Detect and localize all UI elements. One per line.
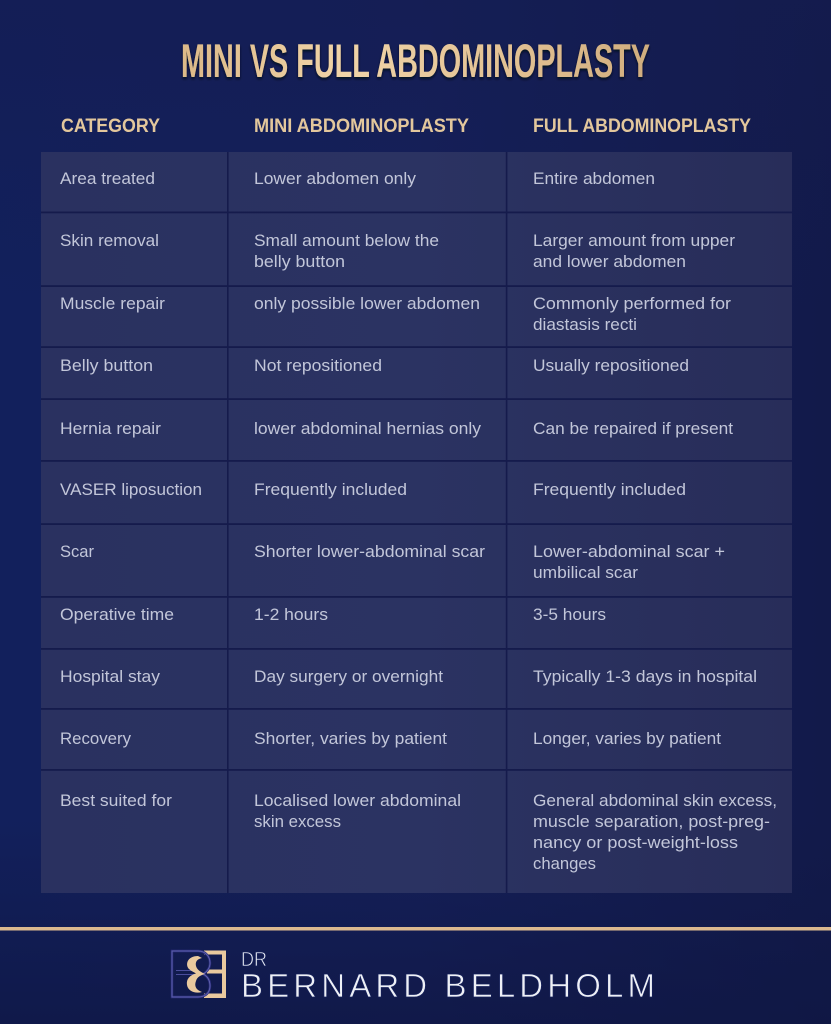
row: hernia repair: Can be repaired if present (533, 420, 733, 438)
table panel background (41, 152, 792, 893)
row: skin removal: belly button (254, 253, 345, 271)
row: vaser liposuction (60, 481, 686, 499)
row: hernia repair: lower abdominal hernias only (254, 420, 482, 438)
row: recovery: Shorter, varies by patient (254, 730, 447, 748)
row: best suited for: skin excess (254, 813, 341, 831)
row: hernia repair: Hernia repair (60, 420, 162, 438)
row: skin removal (60, 232, 736, 271)
row: area treated: Area treated (60, 170, 155, 188)
row: vaser liposuction: VASER liposuction (60, 481, 202, 499)
row: hernia repair (60, 420, 733, 438)
footer gold divider (0, 927, 831, 930)
table header row (61, 116, 751, 137)
row: operative time: 3-5 hours (533, 606, 606, 624)
comparison table (41, 152, 792, 893)
row: muscle repair: Commonly performed for (533, 295, 732, 313)
row: operative time: Operative time (60, 606, 174, 624)
row: best suited for: Best suited for (60, 792, 173, 810)
row: recovery: Longer, varies by patient (533, 730, 721, 748)
row: operative time: 1-2 hours (254, 606, 328, 624)
row: scar: umbilical scar (533, 564, 639, 582)
row: recovery: Recovery (60, 730, 132, 748)
row: muscle repair: diastasis recti (533, 316, 637, 334)
row: hospital stay: Typically 1-3 days in hospital (533, 668, 757, 686)
header: full abdominoplasty: FULL ABDOMINOPLASTY (533, 116, 751, 137)
row: scar: Scar (60, 543, 94, 561)
row: area treated (60, 170, 655, 188)
row: skin removal: Small amount below the (254, 232, 439, 250)
row: skin removal: Skin removal (60, 232, 159, 250)
row: belly button: Belly button (60, 357, 153, 375)
wordmark: DR: DR (241, 949, 267, 971)
row: skin removal: and lower abdomen (533, 253, 686, 271)
header: category: CATEGORY (61, 116, 160, 137)
row: area treated: Lower abdomen only (254, 170, 417, 188)
row: hospital stay: Day surgery or overnight (254, 668, 443, 686)
wordmark: Bernard Beldholm: BERNARD BELDHOLM (241, 967, 655, 1004)
row: best suited for: General abdominal skin excess, (533, 792, 777, 810)
row: muscle repair (60, 295, 732, 334)
logo wordmark (241, 949, 655, 1004)
row: hospital stay: Hospital stay (60, 668, 161, 686)
row: belly button: Not repositioned (254, 357, 382, 375)
row: operative time (60, 606, 606, 624)
row: scar: Lower-abdominal scar + (533, 543, 725, 561)
logo: BB monogram (172, 950, 226, 998)
row: best suited for (60, 792, 777, 873)
row: scar: Shorter lower-abdominal scar (254, 543, 486, 561)
row: scar (60, 543, 725, 582)
row: best suited for: muscle separation, post-preg- (533, 813, 770, 831)
row: vaser liposuction: Frequently included (254, 481, 407, 499)
row: best suited for: nancy or post-weight-loss (533, 834, 738, 852)
row: belly button: Usually repositioned (533, 357, 689, 375)
row: best suited for: changes (533, 855, 596, 873)
row: recovery (60, 730, 721, 748)
header: mini abdominoplasty: MINI ABDOMINOPLASTY (254, 116, 469, 137)
row: vaser liposuction: Frequently included (533, 481, 686, 499)
row: area treated: Entire abdomen (533, 170, 655, 188)
row: hospital stay (60, 668, 757, 686)
row: muscle repair: only possible lower abdomen (254, 295, 480, 313)
row: muscle repair: Muscle repair (60, 295, 166, 313)
row: best suited for: Localised lower abdominal (254, 792, 461, 810)
row: skin removal: Larger amount from upper (533, 232, 736, 250)
row: belly button (60, 357, 689, 375)
